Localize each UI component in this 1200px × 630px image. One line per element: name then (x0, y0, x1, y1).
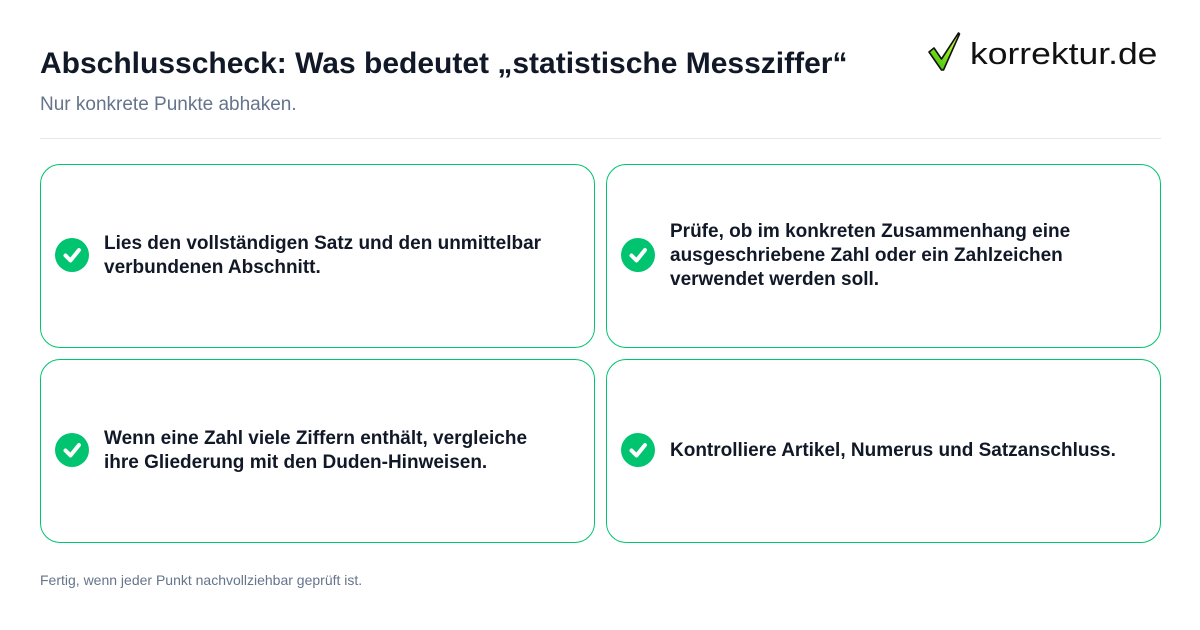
text: item 3 (104, 428, 527, 473)
footer note: Fertig, wenn jeder Punkt nachvollziehbar geprüft ist. (40, 572, 362, 588)
logo: korrektur.de: korrektur.de (970, 36, 1157, 71)
icon: check 3 (55, 433, 89, 467)
text: item 1: Lies den vollständigen Satz und den unmittelbar (104, 233, 541, 254)
icon: check 2 (621, 238, 655, 272)
panel: check item 2 (606, 164, 1161, 348)
icon: check 1 (55, 238, 89, 272)
panel: check item 1 (40, 164, 595, 348)
text: item 1 (104, 233, 541, 278)
icon: check 4 (621, 433, 655, 467)
text: item 3: ihre Gliederung mit den Duden-Hinweisen. (104, 452, 487, 473)
text: item 3: Wenn eine Zahl viele Ziffern enthält, vergleiche (104, 428, 527, 449)
text: item 2 (670, 221, 1070, 290)
subtitle: Nur konkrete Punkte abhaken. (40, 94, 297, 115)
title: Abschlusscheck: Was bedeutet „statistische Messziffer“ (40, 47, 847, 80)
divider (40, 138, 1161, 139)
text: item 4: Kontrolliere Artikel, Numerus und Satzanschluss. (670, 440, 1116, 461)
text: item 2: verwendet werden soll. (670, 269, 879, 290)
panel: check item 3 (40, 359, 595, 543)
text: item 1: verbundenen Abschnitt. (104, 257, 321, 278)
text: item 2: ausgeschriebene Zahl oder ein Zahlzeichen (670, 245, 1063, 266)
text: item 2: Prüfe, ob im konkreten Zusammenhang eine (670, 221, 1070, 242)
panel: check item 4 (606, 359, 1161, 543)
